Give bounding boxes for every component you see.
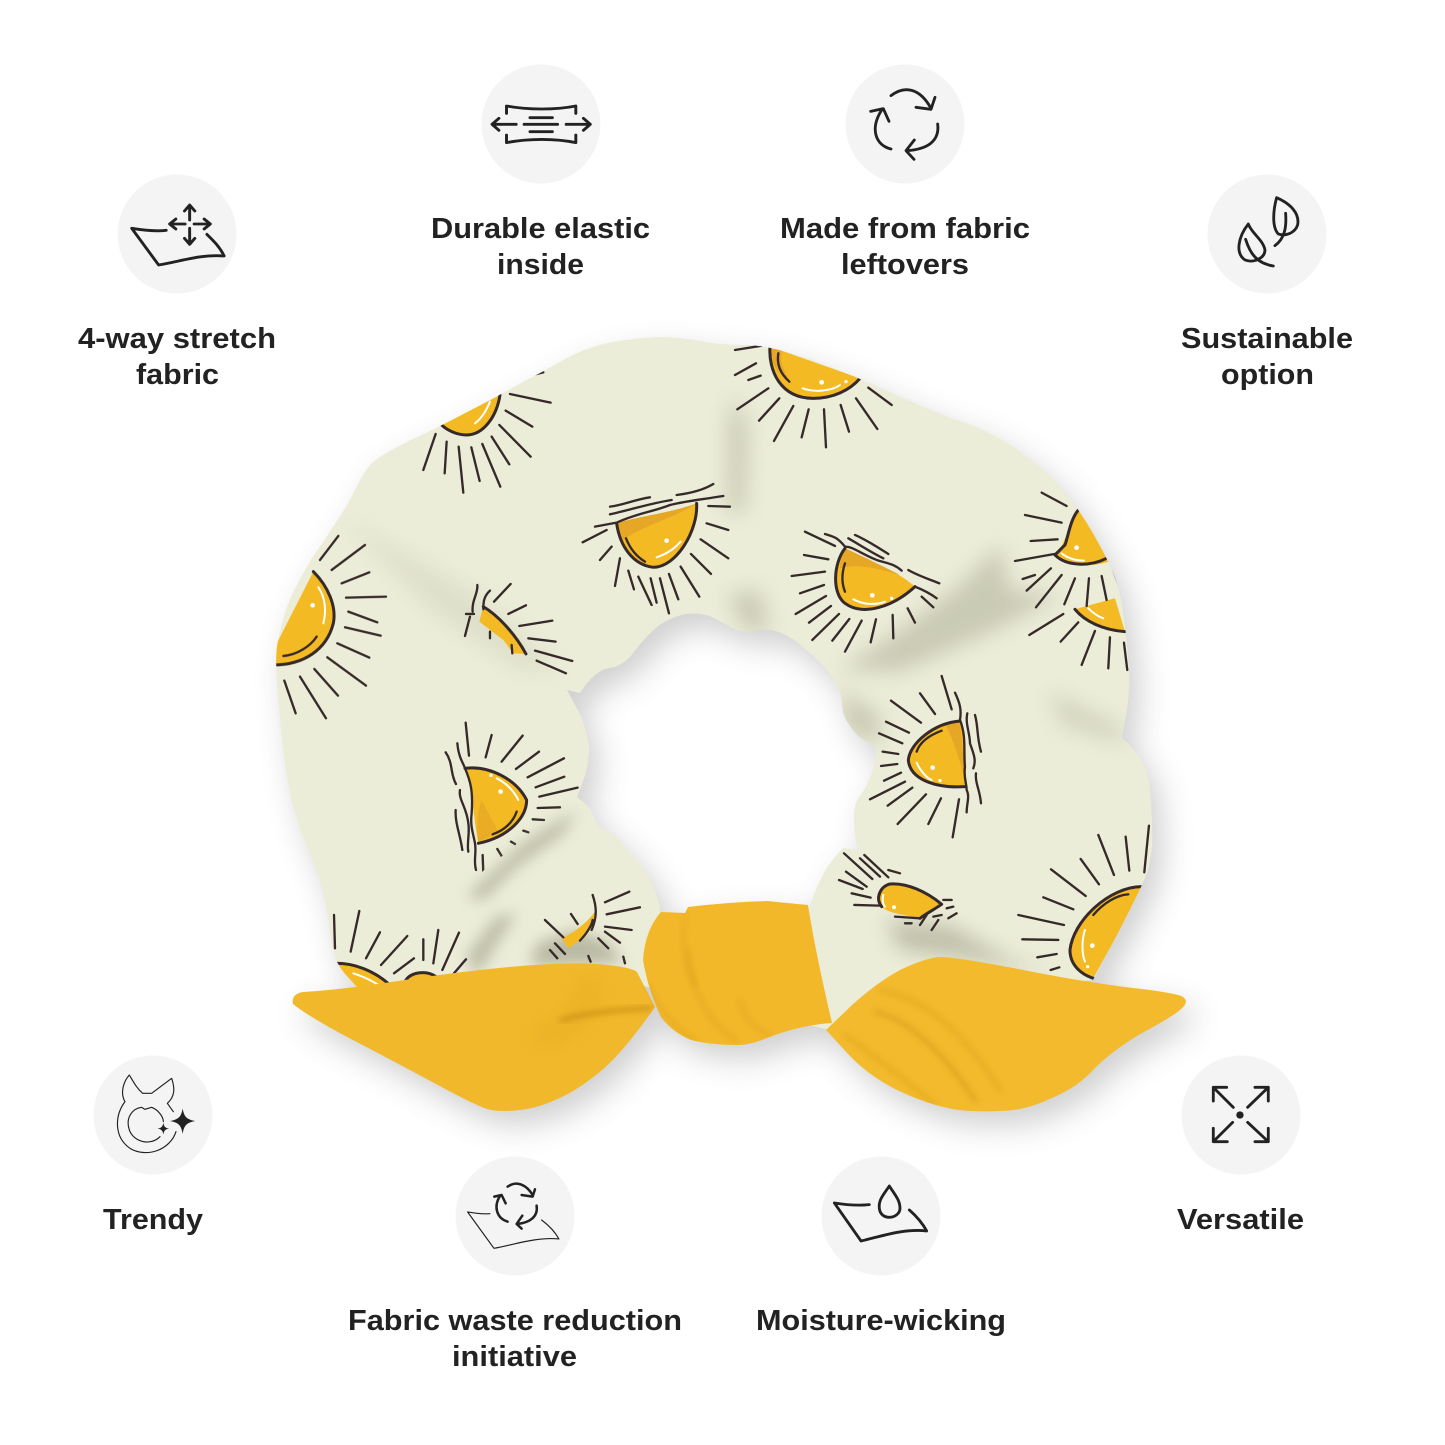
feature: sustainable option — [1181, 174, 1353, 391]
label: Trendy — [103, 1204, 203, 1236]
feature: versatile — [1177, 1056, 1304, 1236]
sun: small left — [465, 584, 572, 673]
yellow bow — [293, 901, 1186, 1111]
bow knot — [643, 901, 832, 1045]
label — [780, 213, 1030, 281]
sun: right middle — [870, 676, 981, 837]
label: inside — [497, 249, 584, 281]
left bow tail — [293, 963, 655, 1111]
sun: centre right — [792, 532, 939, 652]
label: Moisture-wicking — [756, 1305, 1006, 1337]
label: leftovers — [841, 249, 969, 281]
icon: leaves — [1208, 174, 1326, 294]
label: Fabric waste reduction — [348, 1305, 682, 1337]
icon: fabric with recycle arrows — [456, 1156, 574, 1276]
icon: recycle arrows — [846, 64, 964, 184]
label: option — [1221, 359, 1314, 391]
scrunchie fabric body — [276, 337, 1152, 1030]
feature: 4-way stretch fabric — [78, 174, 276, 391]
sun: top right — [735, 346, 892, 447]
drop shadow — [286, 351, 1196, 1125]
label: Sustainable — [1181, 323, 1353, 355]
sun: bottom left — [334, 911, 414, 993]
label — [78, 323, 276, 391]
lower left gathered fold — [404, 811, 642, 980]
sun: upper right fold — [1015, 493, 1120, 607]
feature: fabric waste reduction initiative — [348, 1156, 682, 1373]
feature: made from fabric leftovers — [780, 64, 1030, 281]
label: 4-way stretch — [78, 323, 276, 355]
label: Versatile — [1177, 1204, 1304, 1236]
label — [348, 1305, 682, 1373]
scrunchie product photo — [270, 337, 1196, 1125]
sun: centre top — [583, 484, 730, 613]
sun: left — [270, 536, 386, 718]
icon: four outward arrows — [1182, 1056, 1300, 1174]
feature: moisture-wicking — [756, 1156, 1006, 1337]
label — [1181, 323, 1353, 391]
feature: trendy — [94, 1056, 212, 1236]
fabric fold shading — [270, 346, 1149, 993]
label: initiative — [452, 1341, 577, 1373]
icon: elastic band — [482, 64, 600, 184]
icon: scrunchie with sparkles — [94, 1056, 212, 1174]
label: Made from fabric — [780, 213, 1030, 245]
icon: stretch fabric — [118, 174, 236, 294]
sun: small lower right — [839, 853, 957, 930]
sun: top left — [423, 372, 551, 493]
label — [431, 213, 650, 281]
label: Durable elastic — [431, 213, 650, 245]
label: fabric — [136, 359, 219, 391]
sun: left middle — [446, 723, 578, 873]
sun: bottom right large — [1018, 826, 1149, 978]
icon: fabric with water drop — [822, 1156, 940, 1276]
bow fold shading — [558, 948, 976, 1104]
fabric shading near small sun — [882, 914, 1026, 970]
sun: lower right fold — [1029, 598, 1127, 670]
feature: durable elastic inside — [431, 64, 650, 281]
right bow tail — [826, 957, 1186, 1111]
